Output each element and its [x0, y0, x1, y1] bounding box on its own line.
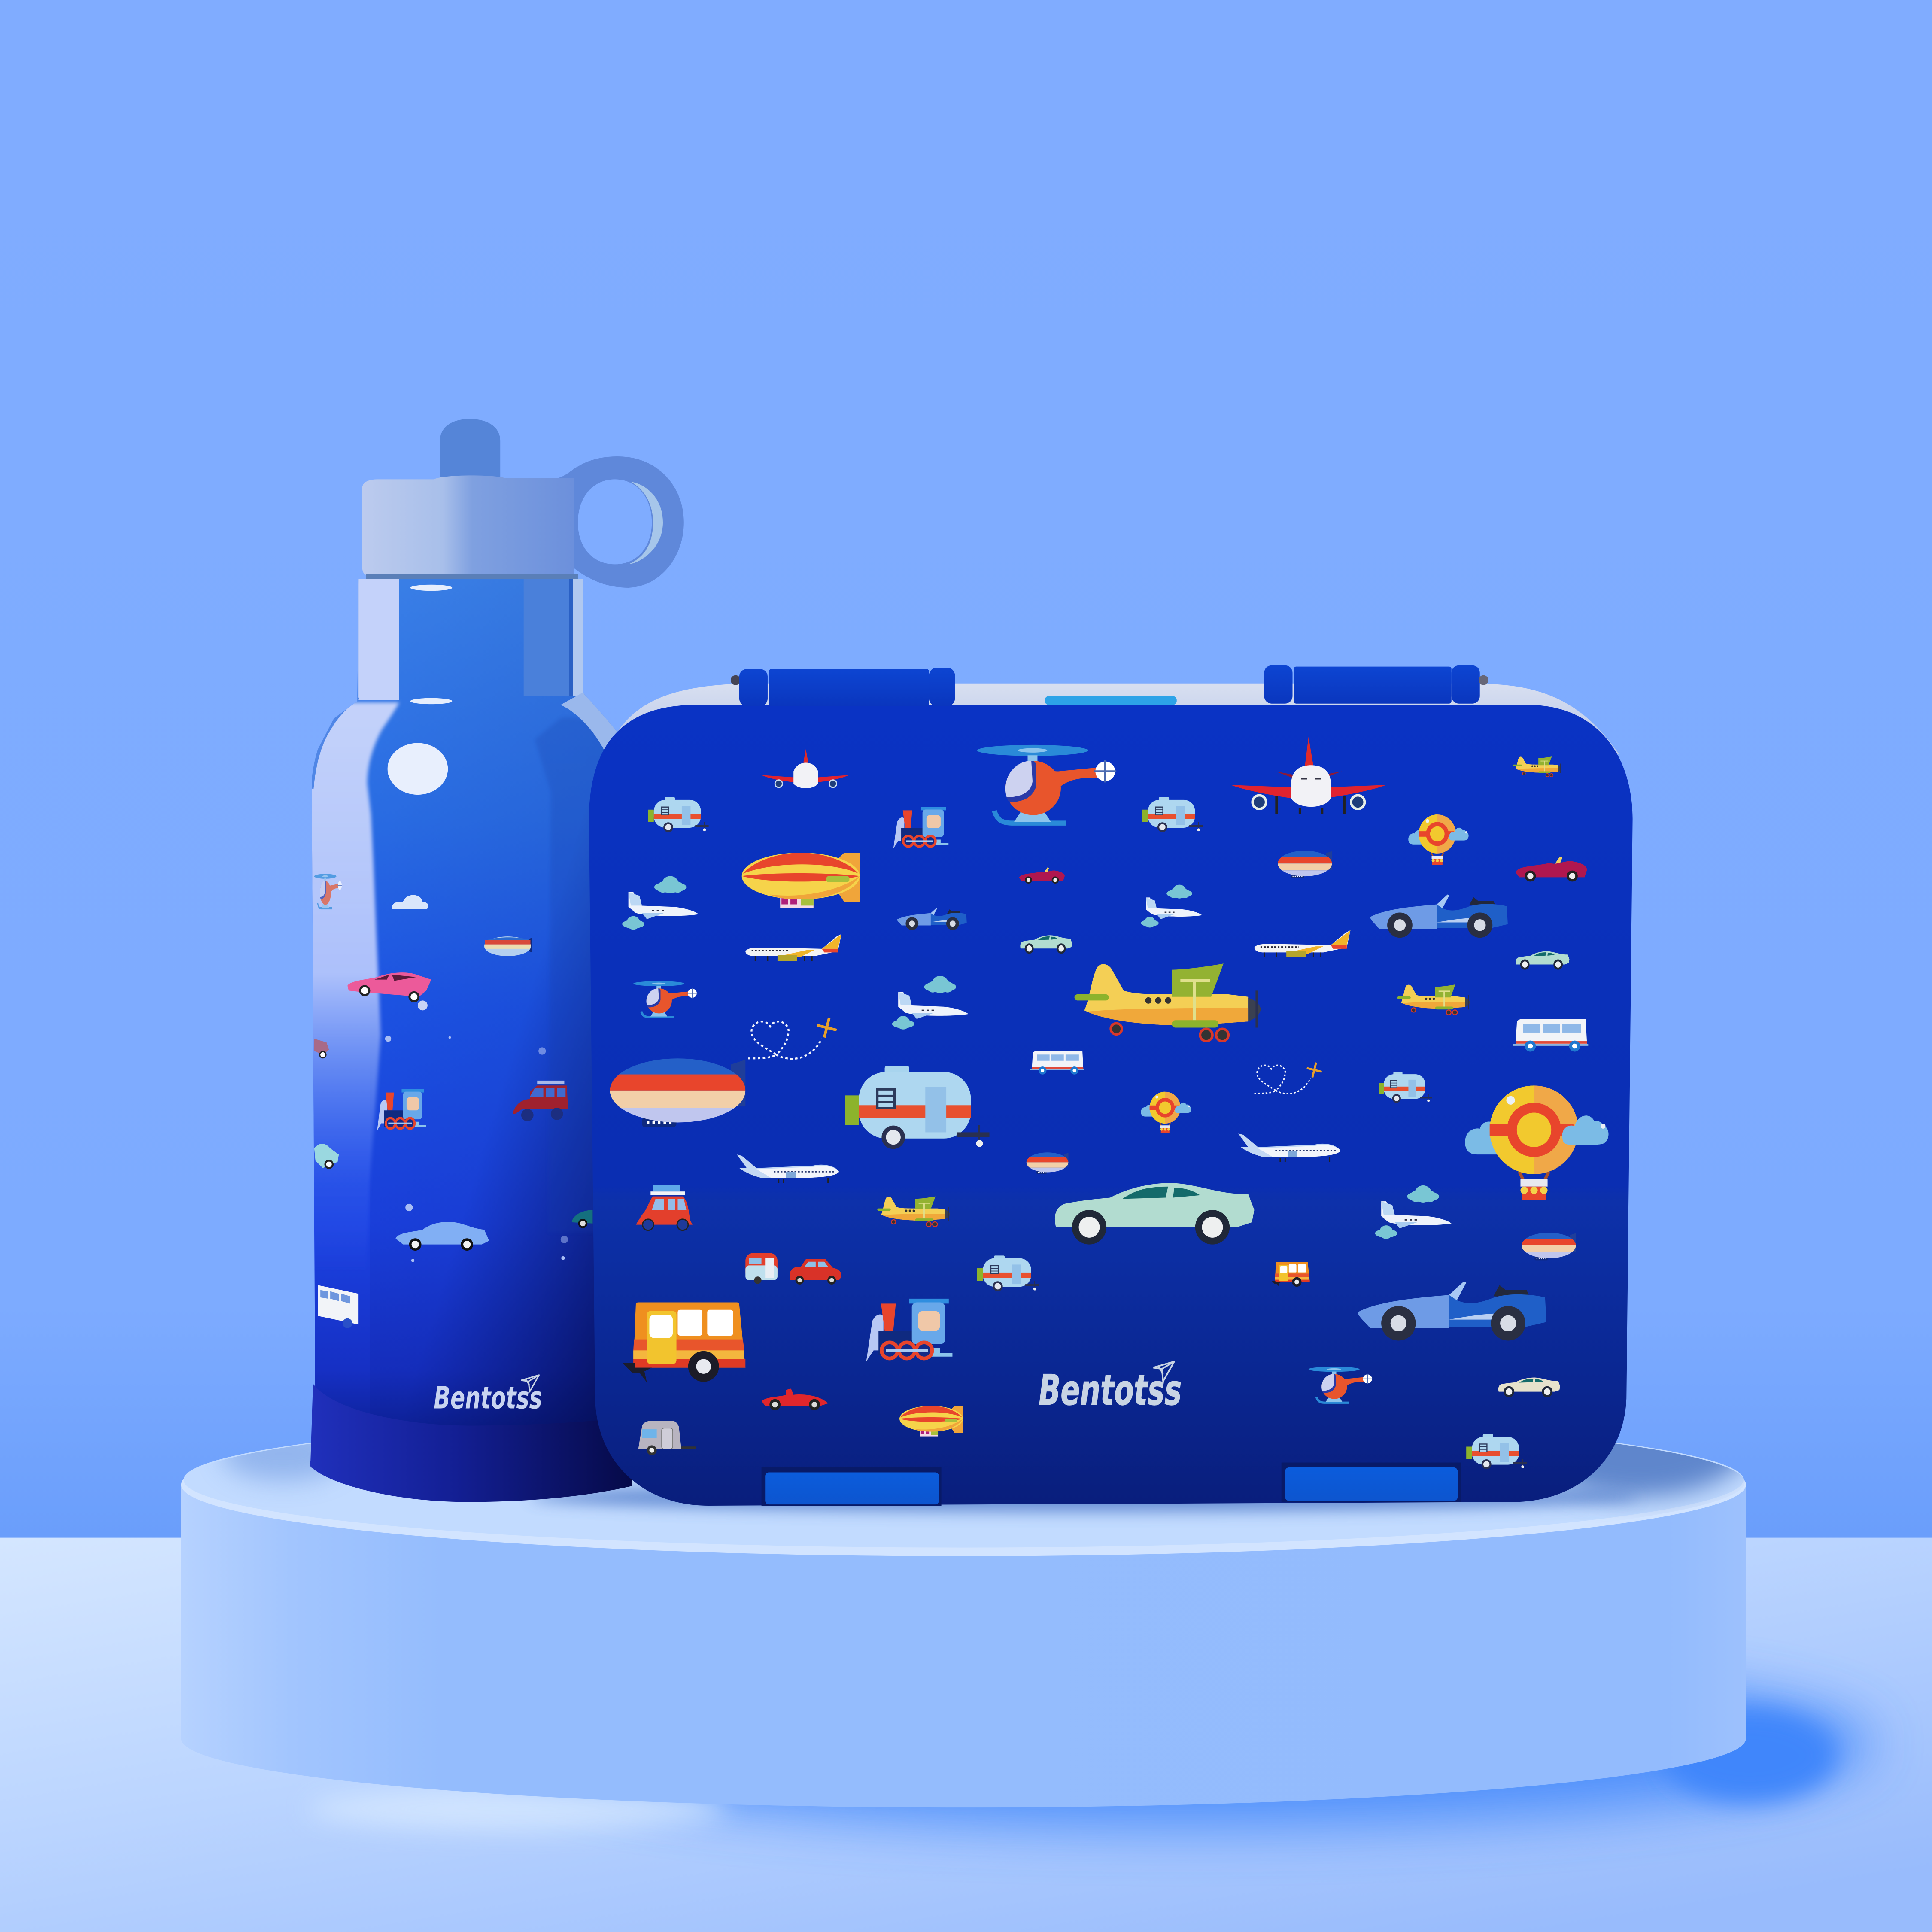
- print: blimp large: [610, 1057, 745, 1127]
- cap seam: [366, 574, 578, 579]
- print: bus centre: [1030, 1051, 1084, 1075]
- print: red caravan and car: [745, 1253, 841, 1285]
- print: sports car top right: [1370, 895, 1508, 938]
- print: airliner yellow tail left: [745, 934, 841, 961]
- lunch box: [589, 665, 1633, 1506]
- print: balloon large: [1465, 1085, 1609, 1200]
- print: caravan top left: [648, 797, 709, 832]
- background wall: [0, 0, 1932, 1538]
- box base rim: [611, 684, 1619, 754]
- print: bus right: [1513, 1019, 1588, 1051]
- water bottle: [308, 419, 684, 1502]
- print: caravan lower: [977, 1255, 1039, 1291]
- top-right hinge: [1264, 665, 1488, 704]
- print: airliner white right: [1238, 1133, 1340, 1162]
- left bottom clip: [762, 1467, 942, 1506]
- bottle print: red jeep: [513, 1081, 568, 1121]
- print: sports car large: [1358, 1282, 1546, 1340]
- print: orange caravan small: [1272, 1262, 1310, 1287]
- bottle highlights: [388, 585, 452, 795]
- print: jet centre top: [1141, 885, 1202, 927]
- print: blimp top: [1278, 850, 1332, 878]
- print: jet left: [622, 876, 699, 930]
- print: train small: [893, 807, 948, 848]
- print: zeppelin large: [742, 853, 860, 908]
- print: mint car large: [1055, 1183, 1255, 1245]
- print: red jeep: [636, 1185, 693, 1230]
- print: balloon centre: [1141, 1092, 1191, 1133]
- print: helicopter small lower: [1309, 1367, 1373, 1403]
- product shadows on podium: [215, 1443, 1745, 1521]
- bottle cap loop: [548, 456, 684, 588]
- loop inner edge: [629, 482, 663, 564]
- print: caravan bottom right: [1466, 1434, 1527, 1469]
- print: seaplane top right: [1513, 756, 1561, 777]
- bottle logo: Bentotss: [434, 1379, 542, 1416]
- bottle print: teal car fragment: [572, 1210, 592, 1227]
- top-left hinge: [731, 668, 955, 706]
- bottle print: blimp: [484, 936, 532, 956]
- print: red roadster right: [1516, 857, 1587, 881]
- lid: [589, 705, 1633, 1506]
- bottle logo: [434, 1375, 542, 1416]
- print: helicopter small left: [633, 981, 697, 1017]
- bottle cap: [362, 475, 574, 578]
- bottle print: pink car: [347, 972, 431, 1010]
- teal latch strip: [1045, 696, 1177, 705]
- print: seaplane large: [1075, 963, 1261, 1041]
- print: grey caravan: [638, 1421, 696, 1455]
- podium: [181, 1412, 1746, 1807]
- print: mint car right: [1516, 951, 1570, 970]
- print: red roadster small: [1019, 867, 1065, 884]
- print: red race car: [762, 1388, 828, 1410]
- right bottom clip: [1282, 1463, 1461, 1502]
- print: seaplane lower: [877, 1197, 950, 1227]
- bottle print: red car fragment: [314, 1039, 329, 1058]
- print: caravan top centre: [1142, 797, 1203, 832]
- print: zeppelin small: [899, 1406, 963, 1437]
- print: cream car: [1498, 1378, 1560, 1397]
- print: small front plane: [762, 749, 849, 788]
- bottle print: mint car: [314, 1144, 339, 1168]
- bottle cap spout: [440, 419, 500, 487]
- bottle print: cloud: [392, 895, 428, 909]
- print: airliner white left: [737, 1154, 839, 1183]
- bottle print: helicopter: [314, 874, 342, 908]
- box logo: Bentotss: [1039, 1366, 1182, 1415]
- print: front plane: [1231, 737, 1386, 814]
- bottle body: [308, 577, 629, 1439]
- box logo: [1039, 1361, 1182, 1415]
- floor: [0, 1538, 1932, 1932]
- silicone base: [310, 1384, 632, 1502]
- print: sports car small: [897, 908, 967, 930]
- print: balloon top: [1408, 814, 1469, 865]
- print: caravan large: [845, 1066, 990, 1149]
- print: jet lower right: [1375, 1185, 1452, 1239]
- print: seaplane right: [1397, 984, 1470, 1015]
- print: train large: [866, 1299, 952, 1361]
- print: heart trail right: [1255, 1063, 1322, 1094]
- bottle print: dots: [385, 1036, 568, 1262]
- print: mint car centre: [1020, 935, 1072, 954]
- print: helicopter large: [977, 745, 1116, 823]
- bottle print: train: [377, 1089, 426, 1131]
- print: airliner yellow tail right: [1255, 930, 1350, 957]
- bottle print: bus: [318, 1285, 358, 1328]
- print: caravan right: [1379, 1072, 1432, 1103]
- floor shadow and reflection: [308, 1660, 1873, 1831]
- print: orange caravan large: [622, 1302, 745, 1382]
- print: blimp lower right: [1522, 1232, 1576, 1260]
- print: heart trail left: [748, 1018, 837, 1059]
- print: jet centre: [892, 976, 969, 1030]
- bottle print: blue car: [395, 1222, 489, 1251]
- print: blimp centre: [1027, 1152, 1068, 1174]
